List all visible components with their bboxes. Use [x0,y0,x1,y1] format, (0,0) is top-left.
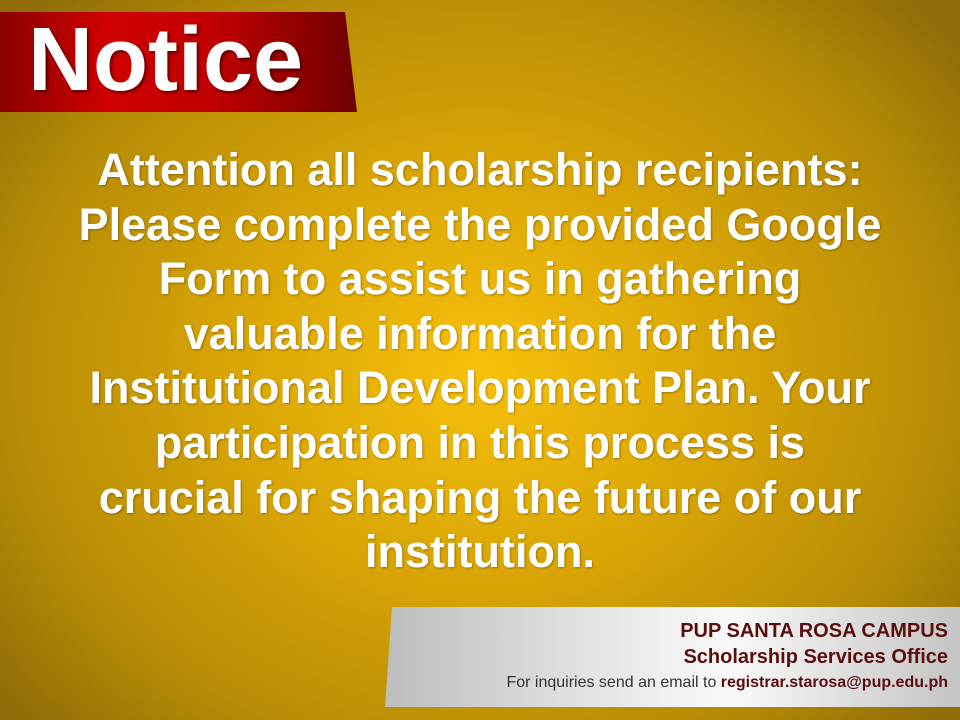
office name: Scholarship Services Office [683,646,948,668]
title banner: Notice [28,10,303,110]
main message: institution. [365,526,595,577]
main message: crucial for shaping the future of our [99,472,861,523]
main message: valuable information for the [184,308,776,359]
main message: Form to assist us in gathering [159,253,801,304]
campus name: PUP SANTA ROSA CAMPUS [680,620,948,642]
main message: participation in this process is [155,417,805,468]
main message: Attention all scholarship recipients: [97,144,863,195]
footer panel [385,607,960,707]
main message: Please complete the provided Google [79,199,881,250]
main message: Institutional Development Plan. Your [90,362,870,413]
contact line: For inquiries send an email to registrar.starosa@pup.edu.ph [506,674,948,691]
main message [79,144,882,577]
